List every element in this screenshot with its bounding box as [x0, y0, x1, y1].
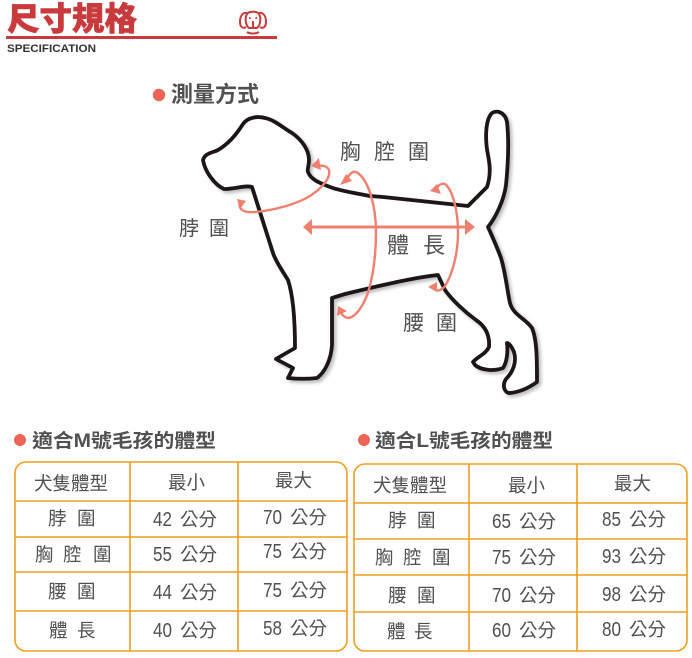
table: M size: 公分 [180, 582, 217, 603]
table: L size: 公分 [629, 546, 666, 567]
table: M size: 70 [263, 506, 282, 529]
table: M size: 公分 [180, 509, 217, 530]
table: L size [354, 464, 687, 651]
table: L size: 75 [492, 546, 511, 569]
label: neck: 脖圍 [179, 217, 229, 240]
table: M size: 55 [153, 543, 172, 566]
title underline [6, 36, 277, 39]
table: L size: 60 [492, 619, 511, 642]
table: L size: 最小 [508, 475, 546, 496]
table: M size: 58 [263, 617, 282, 640]
table: M size: 公分 [290, 541, 327, 562]
table: M size: 公分 [290, 618, 327, 639]
icon: dog face [240, 12, 266, 34]
table: L size: 65 [492, 510, 511, 533]
heading: measuring method: 測量方式 [171, 82, 259, 107]
arrow: neck measurement [237, 158, 329, 212]
table: M size: 公分 [290, 507, 327, 528]
table: L size: 公分 [519, 585, 556, 606]
dog outline [203, 112, 537, 393]
table: M size: 犬隻體型 [34, 473, 108, 494]
table: M size: 胸腔圍 [35, 544, 112, 565]
table: M size: 42 [153, 508, 172, 531]
table: M size: 公分 [180, 620, 217, 641]
table: L size: 胸腔圍 [375, 547, 451, 568]
table: L size: 85 [602, 508, 621, 531]
table: L size: 公分 [519, 511, 556, 532]
table: L size: 公分 [629, 509, 666, 530]
table: M size: 公分 [180, 544, 217, 565]
table: M size: 腰圍 [48, 581, 96, 602]
table: L size: 體長 [387, 621, 433, 642]
table: L size: 犬隻體型 [373, 475, 447, 496]
label: waist: 腰圍 [403, 312, 457, 335]
table: L size: 公分 [519, 547, 556, 568]
table: L size: 70 [492, 584, 511, 607]
heading: L size: 適合L號毛孩的體型 [375, 429, 553, 452]
table: M size: 脖圍 [48, 508, 96, 529]
table: L size: 腰圍 [388, 585, 436, 606]
table: L size: 最大 [614, 473, 651, 494]
table: M size: 75 [263, 579, 282, 602]
arrow: body length [303, 219, 475, 235]
table: L size: 公分 [629, 619, 666, 640]
table: M size: 公分 [290, 580, 327, 601]
subtitle: SPECIFICATION [7, 43, 96, 55]
title: 尺寸規格 [7, 1, 138, 37]
table: M size: 40 [153, 619, 172, 642]
table: M size: 75 [263, 540, 282, 563]
table: L size: 公分 [519, 620, 556, 641]
label: body length: 體長 [387, 233, 445, 258]
table: M size: 最小 [168, 472, 206, 493]
table: L size: 98 [602, 583, 621, 606]
table: M size [15, 462, 347, 651]
arrow: waist measurement [428, 184, 458, 292]
table: M size: 44 [153, 581, 172, 604]
arrow: chest measurement [337, 172, 376, 318]
table: M size: 體長 [49, 620, 96, 641]
table: L size: 公分 [629, 584, 666, 605]
table: L size: 80 [602, 618, 621, 641]
table: L size: 93 [602, 545, 621, 568]
table: M size: 最大 [275, 470, 312, 491]
label: chest: 胸腔圍 [340, 141, 429, 164]
heading: M size: 適合M號毛孩的體型 [32, 429, 216, 452]
table: L size: 脖圍 [388, 510, 436, 531]
